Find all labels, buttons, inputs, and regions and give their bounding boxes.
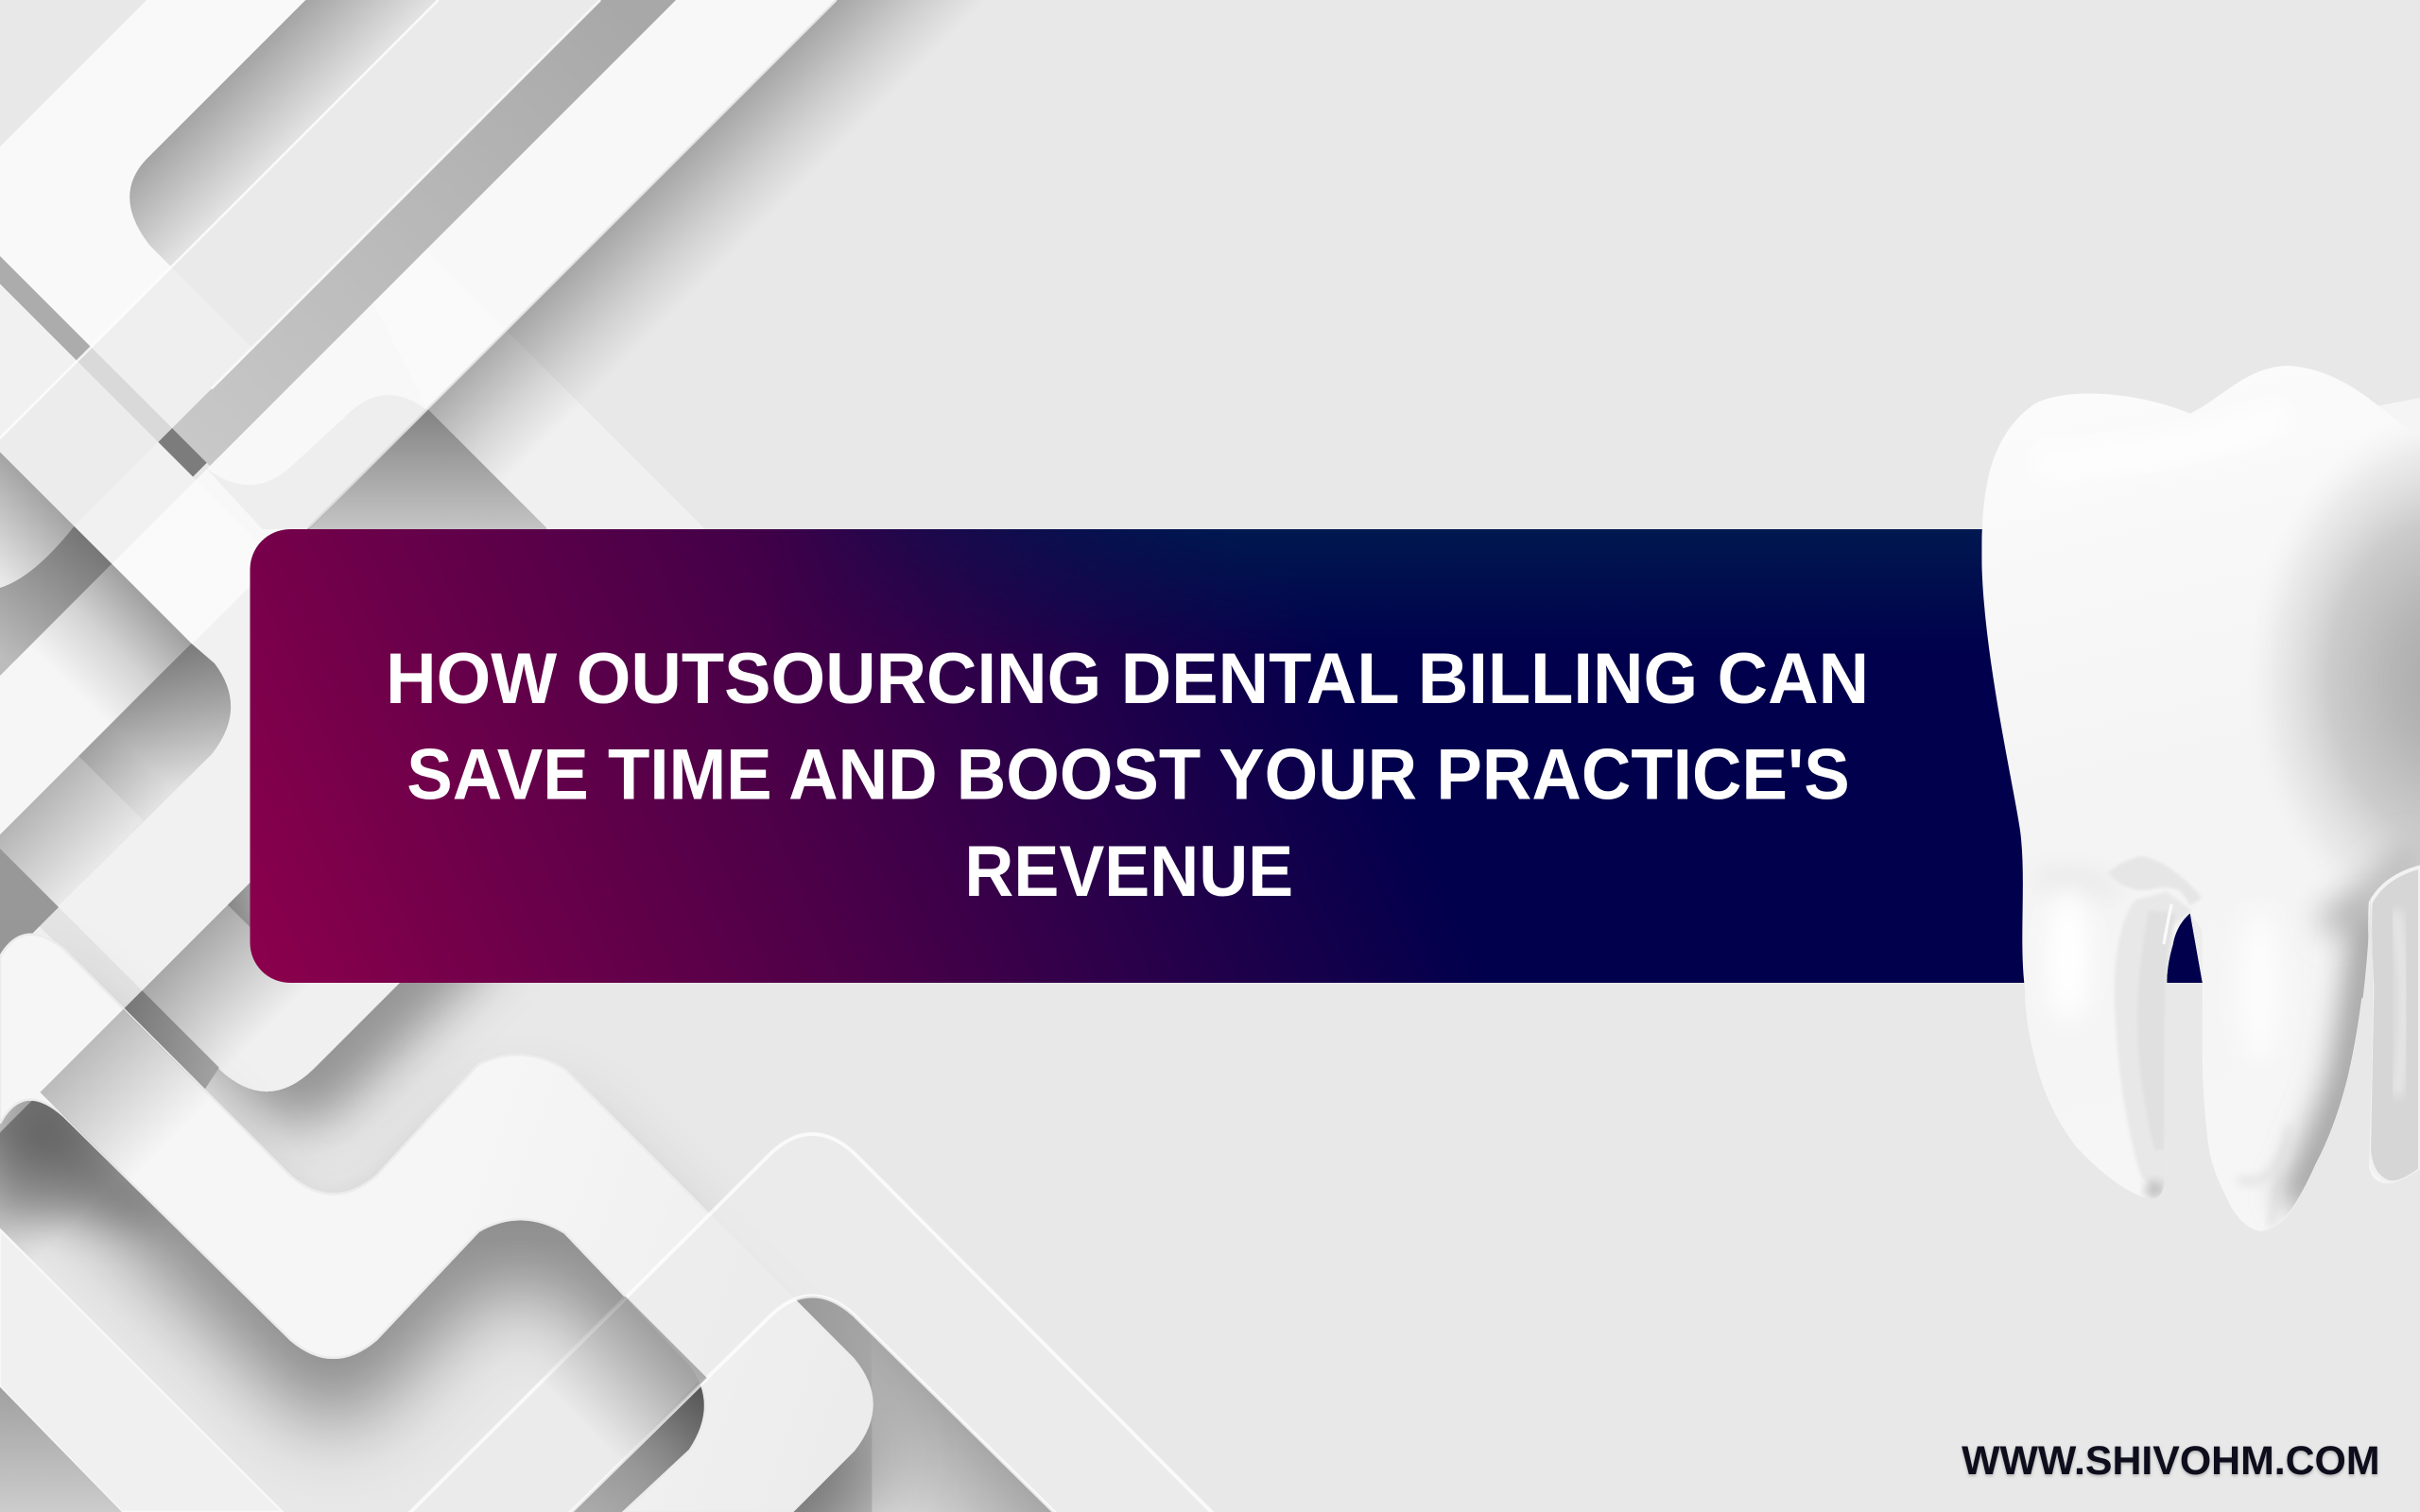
strip under top chevron — [0, 256, 172, 442]
mid zigzag band — [0, 678, 463, 1091]
title text: REVENUE — [964, 832, 1293, 912]
overlap strip on fold — [39, 907, 142, 1009]
back lobe — [2378, 398, 2420, 438]
lower left band — [0, 1229, 283, 1512]
top white chevron — [0, 0, 305, 428]
large white zigzag band — [0, 935, 872, 1512]
icon: tooth — [1960, 355, 2420, 1242]
right root edge shading — [2295, 910, 2372, 1207]
banner gradient — [250, 529, 2315, 983]
inner root highlight — [2164, 904, 2171, 944]
corner shadow — [0, 1387, 122, 1512]
shadow cast beside top band — [219, 0, 988, 617]
shadow on zigzag left arm — [40, 1009, 213, 1182]
decorative geometric bands — [0, 0, 1215, 1512]
second root tip shade — [2239, 1172, 2269, 1186]
left folded band — [0, 284, 424, 1132]
outlined translucent chevron — [407, 1134, 1215, 1512]
root crevice — [2108, 856, 2203, 905]
translucent band one — [0, 0, 837, 836]
shaded section of band one — [0, 564, 191, 834]
shadow gap beside top white band — [130, 0, 439, 266]
gray pocket under fold — [0, 644, 231, 964]
shaded blob at left edge — [0, 452, 74, 588]
right root rim — [2288, 998, 2363, 1215]
dark strip between zigzags — [124, 990, 219, 1095]
banner top glow — [839, 529, 1985, 612]
crown lower dark area — [2323, 851, 2420, 926]
dark diamond — [158, 428, 207, 476]
pocket shadow near fold tip — [61, 644, 231, 856]
website footer: WWW.SHIVOHM.COM — [1962, 1438, 2380, 1483]
shadow inside lower fold — [568, 1296, 872, 1512]
upper right chevron band — [347, 232, 741, 565]
title banner — [250, 529, 2315, 983]
shadow on mid zigzag — [0, 817, 478, 1296]
dark wedge — [0, 526, 112, 676]
root tip shadow — [2145, 1180, 2164, 1199]
title text — [386, 639, 1869, 912]
first root highlight — [2056, 915, 2080, 998]
inner root strip — [2115, 892, 2191, 1200]
dark fold pocket — [568, 1380, 734, 1512]
shadow right of lower fold — [872, 1333, 1057, 1512]
crown fold shading — [2037, 879, 2118, 892]
inner root darker strip — [2169, 923, 2170, 928]
soft dark glow under first peak — [0, 1119, 170, 1227]
third root — [2369, 868, 2420, 1182]
dark triangle in pocket — [0, 849, 59, 966]
shadow on chevron beneath zigzag — [540, 1296, 707, 1463]
title text: SAVE TIME AND BOOST YOUR PRACTICE'S — [406, 735, 1850, 816]
faint chevron inside band one — [205, 395, 427, 529]
second root highlight — [2239, 910, 2279, 1065]
crown side shading — [2271, 442, 2420, 877]
gap between top bands — [172, 0, 676, 466]
tooth body — [1960, 355, 2420, 1242]
notch sliver — [2190, 914, 2203, 983]
third root highlight — [2395, 910, 2403, 1095]
crown top ridge highlight — [2037, 417, 2284, 463]
title text: HOW OUTSOURCING DENTAL BILLING CAN — [386, 639, 1869, 719]
second root tip crease — [2269, 1210, 2274, 1224]
lighter overlap in pocket — [0, 756, 144, 907]
shadow triangle under chevron — [275, 409, 546, 565]
translucent band two — [0, 0, 600, 588]
